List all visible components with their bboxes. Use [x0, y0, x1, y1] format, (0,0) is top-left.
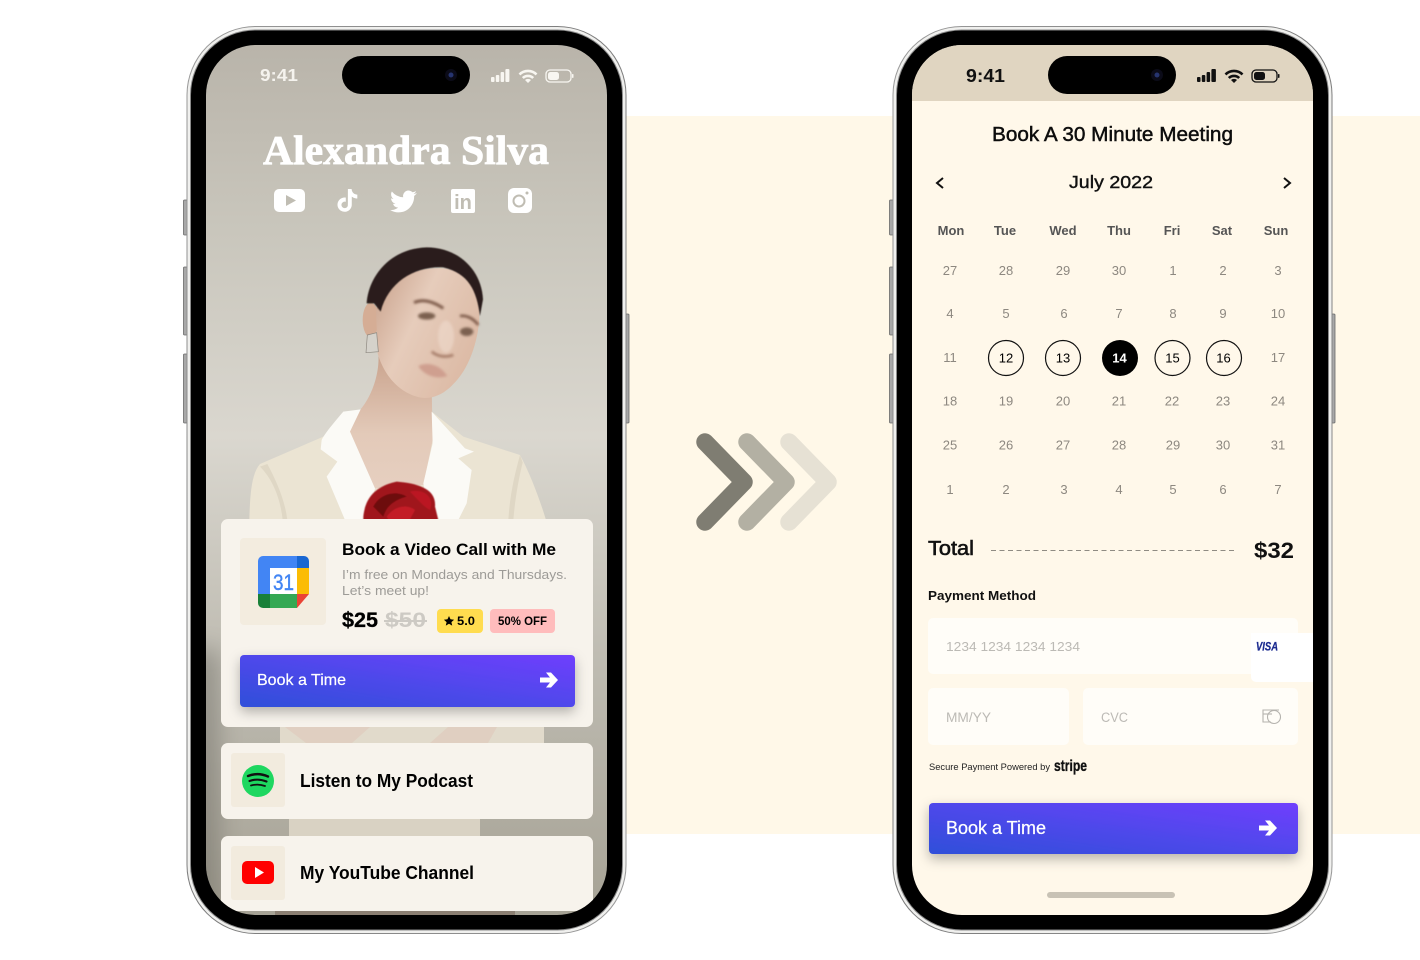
- screen: booking page: [912, 45, 1313, 915]
- card title: Book a Video Call with Me: [342, 540, 556, 559]
- card: youtube: [221, 836, 593, 911]
- calendar dates: 31: [1271, 438, 1285, 452]
- calendar dates: 7: [1274, 482, 1282, 497]
- status time: 9:41: [966, 66, 1005, 86]
- calendar dates: 7: [1115, 306, 1123, 321]
- calendar dates: 17: [1271, 350, 1285, 365]
- background band: [400, 116, 1420, 834]
- portrait photo: [249, 247, 546, 520]
- calendar dates: 11: [943, 350, 957, 365]
- expiry field: [928, 688, 1069, 745]
- page title: Book A 30 Minute Meeting: [992, 124, 1233, 146]
- calendar thumbnail: 31: [273, 570, 294, 595]
- selected date: [1102, 340, 1138, 376]
- calendar dates: 28: [999, 263, 1013, 278]
- calendar dates: 29: [1166, 438, 1180, 452]
- calendar dates: 10: [1271, 306, 1285, 321]
- icon: twitter: [390, 191, 417, 212]
- weekday labels: [938, 223, 1288, 238]
- button: book a time: Book a Time: [946, 818, 1046, 838]
- cvc field: [1083, 688, 1298, 745]
- left phone: [184, 26, 629, 934]
- calendar dates: 29: [1056, 263, 1070, 278]
- total row: $32: [1254, 538, 1294, 563]
- social icons: [274, 188, 532, 214]
- calendar dates: 28: [1112, 438, 1126, 452]
- calendar thumbnail: [240, 538, 326, 625]
- calendar dates: 30: [1112, 263, 1126, 278]
- calendar dates: 22: [1165, 394, 1179, 408]
- calendar dates: 6: [1219, 482, 1227, 497]
- highlighted date numbers: 13: [1056, 350, 1070, 366]
- old price: [384, 611, 427, 628]
- facial features: [414, 301, 478, 377]
- calendar dates: 2: [1002, 482, 1010, 497]
- price: $25: [342, 609, 378, 632]
- highlighted date numbers: 14: [1112, 350, 1127, 366]
- calendar dates: 4: [946, 306, 954, 321]
- calendar dates: 1: [946, 482, 954, 497]
- calendar dates: 6: [1060, 306, 1068, 321]
- card number field: 1234 1234 1234 1234: [946, 639, 1080, 654]
- highlighted date numbers: 16: [1216, 350, 1231, 366]
- button: book a time: [929, 803, 1298, 854]
- dynamic island: [342, 56, 470, 94]
- highlighted date numbers: 12: [999, 350, 1013, 366]
- hair: [367, 247, 483, 316]
- jacket between cards: [280, 727, 544, 743]
- chevron arrows: [705, 442, 828, 522]
- calendar dates: 30: [1216, 438, 1230, 452]
- weekday labels: Sun: [1264, 223, 1288, 238]
- calendar dates: 25: [943, 438, 957, 452]
- photo backdrop: [190, 45, 607, 930]
- visa badge: VISA: [1256, 642, 1278, 654]
- link label: My YouTube Channel: [300, 863, 474, 883]
- calendar dates: 27: [943, 263, 957, 278]
- card: book a video call: [221, 519, 593, 727]
- month header: July 2022: [1069, 172, 1153, 192]
- rose: [363, 482, 438, 520]
- discount badge: 50% OFF: [498, 614, 547, 628]
- total row: [928, 538, 1294, 563]
- available dates: [988, 340, 1242, 376]
- calendar dates: 5: [1002, 306, 1010, 321]
- rating badge: [437, 609, 483, 633]
- face: [376, 268, 479, 398]
- expiry field: MM/YY: [946, 710, 991, 725]
- icon: youtube red: [242, 861, 274, 884]
- calendar dates: 27: [1056, 438, 1070, 452]
- icon: tiktok: [338, 189, 357, 212]
- calendar dates: 8: [1169, 306, 1177, 321]
- highlighted date numbers: 15: [1165, 350, 1180, 366]
- icon: linkedin: [451, 189, 475, 214]
- card: podcast: [221, 743, 593, 819]
- side buttons: [890, 200, 1335, 423]
- visa badge: [1251, 633, 1313, 682]
- calendar dates: 21: [1112, 394, 1126, 408]
- calendar dates: 4: [1115, 482, 1123, 497]
- collar: [321, 409, 375, 520]
- icon: youtube: [274, 189, 305, 212]
- calendar dates: 18: [943, 394, 957, 408]
- weekday labels: Sat: [1212, 223, 1233, 238]
- status time: 9:41: [260, 65, 298, 85]
- calendar dates: 3: [1060, 482, 1068, 497]
- phone frame: [186, 26, 626, 934]
- card number field: [928, 618, 1298, 674]
- weekday labels: Mon: [938, 223, 964, 238]
- weekday labels: Thu: [1107, 223, 1131, 238]
- jacket below podcast card: [289, 819, 480, 836]
- status bar: [912, 45, 1313, 101]
- weekday labels: Tue: [994, 223, 1016, 238]
- icon: spotify: [242, 765, 274, 797]
- screen: profile page: [190, 45, 607, 930]
- dynamic island: [1048, 56, 1176, 94]
- highlighted date numbers: [999, 350, 1231, 366]
- calendar dates: 19: [999, 394, 1013, 408]
- calendar dates: 2: [1219, 263, 1227, 278]
- icon: linkedin: in: [454, 192, 472, 214]
- jacket: [249, 412, 546, 520]
- calendar dates: 9: [1219, 306, 1227, 321]
- calendar dates: 26: [999, 438, 1013, 452]
- button: book a time: [240, 655, 575, 707]
- status icons: [1197, 69, 1280, 83]
- calendar dates: 5: [1169, 482, 1177, 497]
- ear: [362, 303, 377, 336]
- cvc field: CVC: [1101, 710, 1128, 725]
- calendar dates: 20: [1056, 394, 1070, 408]
- status icons: [491, 69, 574, 83]
- phone frame: [892, 26, 1332, 934]
- stripe note: Secure Payment Powered by: [929, 762, 1050, 773]
- calendar dates: 1: [1169, 263, 1177, 278]
- discount badge: [490, 609, 555, 633]
- link label: Listen to My Podcast: [300, 771, 473, 791]
- payment heading: Payment Method: [928, 588, 1036, 603]
- calendar dates: [943, 263, 1285, 497]
- neck: [345, 353, 433, 488]
- icon: instagram: [508, 188, 532, 213]
- card description: Let’s meet up!: [342, 583, 429, 598]
- earring: [366, 333, 378, 353]
- card description: [343, 570, 566, 598]
- weekday labels: Fri: [1164, 223, 1180, 238]
- total row: Total: [928, 538, 974, 560]
- month header: [937, 172, 1290, 192]
- rating badge: 5.0: [457, 614, 475, 628]
- calendar dates: 24: [1271, 394, 1285, 408]
- name heading: Alexandra Silva: [263, 127, 549, 173]
- stripe note: [929, 758, 1087, 775]
- stripe note: stripe: [1054, 758, 1087, 775]
- side buttons: [184, 200, 629, 423]
- right phone: [890, 26, 1335, 934]
- old price: $50: [385, 609, 426, 632]
- calendar dates: 23: [1216, 394, 1230, 408]
- home indicator: [1047, 892, 1175, 898]
- card description: I’m free on Mondays and Thursdays.: [342, 567, 567, 582]
- calendar dates: 3: [1274, 263, 1282, 278]
- weekday labels: Wed: [1049, 223, 1077, 238]
- button: book a time: Book a Time: [257, 672, 346, 689]
- icon: cvc card: [1263, 710, 1280, 724]
